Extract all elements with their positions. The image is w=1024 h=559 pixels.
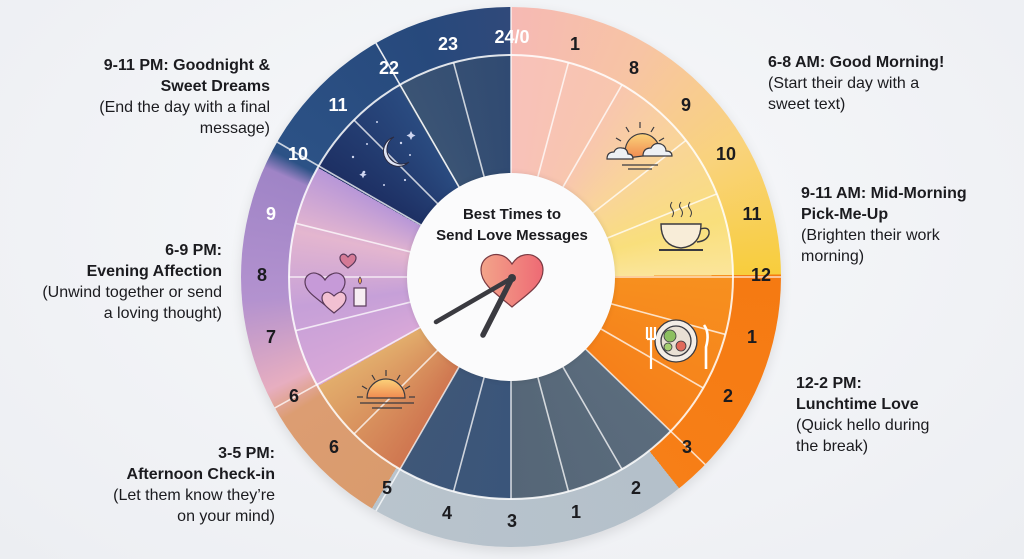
text: 6-9 PM: (Unwind together or send [42, 284, 222, 301]
center title [436, 206, 588, 244]
center white disc [407, 173, 615, 381]
text: 9-11 PM: message) [200, 120, 270, 137]
text: 6-8 AM: (Start their day with a [768, 75, 919, 92]
hour numbers: 1 [570, 34, 580, 54]
text: 9-11 PM: (End the day with a final [99, 99, 270, 116]
text: 12-2 PM [796, 375, 929, 455]
text: 6-9 PM [42, 242, 222, 322]
icon: sunset [357, 370, 415, 408]
hour numbers: 24/0 [494, 27, 530, 47]
hour numbers [257, 27, 771, 531]
text: 12-2 PM: Lunchtime Love [796, 396, 919, 413]
text: 9-11 PM [99, 57, 270, 137]
text: 12-2 PM: (Quick hello during [796, 417, 929, 434]
hour numbers: 3 [682, 437, 692, 457]
hour numbers: 7 [266, 327, 276, 347]
text: 12-2 PM: 12-2 PM: [796, 375, 862, 392]
hour numbers: 6 [289, 386, 299, 406]
hour numbers: 9 [266, 204, 276, 224]
hour numbers: 4 [442, 503, 452, 523]
text: 3-5 PM: 3-5 PM: [218, 445, 275, 462]
hour numbers: 10 [288, 144, 308, 164]
outer ring colors [241, 7, 781, 547]
text: 6-8 AM: sweet text) [768, 96, 845, 113]
hour numbers: 2 [723, 386, 733, 406]
icon: hearts and candle [305, 254, 366, 313]
hour numbers: 3 [507, 511, 517, 531]
hour numbers: 8 [629, 58, 639, 78]
text: 6-9 PM: a loving thought) [104, 305, 222, 322]
text: 3-5 PM: Afternoon Check-in [127, 466, 275, 483]
text: 6-8 AM [768, 54, 944, 113]
text: 3-5 PM: (Let them know they’re [113, 487, 275, 504]
text: 9-11 PM: 9-11 PM: Goodnight & [104, 57, 270, 74]
hour numbers: 9 [681, 95, 691, 115]
center title: Send Love Messages [436, 227, 588, 244]
text: 12-2 PM: the break) [796, 438, 868, 455]
icon: coffee cup [659, 202, 709, 250]
hour numbers: 11 [328, 95, 348, 115]
text: 6-8 AM: 6-8 AM: Good Morning! [768, 54, 944, 71]
text: 9-11 AM: 9-11 AM: Mid-Morning [801, 185, 967, 202]
icon: moon and stars [352, 121, 416, 186]
text: 3-5 PM: on your mind) [177, 508, 275, 525]
hour numbers: 1 [571, 502, 581, 522]
hour numbers: 10 [716, 144, 736, 164]
icon: plate with fork and knife [647, 320, 708, 369]
hour numbers: 8 [257, 265, 267, 285]
hour numbers: 12 [751, 265, 771, 285]
icon: sunrise with clouds [607, 122, 672, 169]
text: 3-5 PM [113, 445, 275, 525]
text: 9-11 AM: morning) [801, 248, 864, 265]
hour numbers: 11 [742, 204, 762, 224]
text: 9-11 AM: (Brighten their work [801, 227, 940, 244]
text: 9-11 AM [801, 185, 967, 265]
hour numbers: 6 [329, 437, 339, 457]
text: 6-9 PM: Evening Affection [87, 263, 222, 280]
text: 9-11 PM: Sweet Dreams [161, 78, 270, 95]
hour numbers: 1 [747, 327, 757, 347]
text: 9-11 AM: Pick-Me-Up [801, 206, 888, 223]
icon: heart with clock hands [436, 255, 543, 335]
hour numbers: 23 [438, 34, 458, 54]
hour numbers: 22 [379, 58, 399, 78]
center title: Best Times to [463, 206, 561, 223]
hour numbers: 2 [631, 478, 641, 498]
text: 6-9 PM: 6-9 PM: [165, 242, 222, 259]
inner sector colors [289, 55, 733, 499]
hour numbers: 5 [382, 478, 392, 498]
